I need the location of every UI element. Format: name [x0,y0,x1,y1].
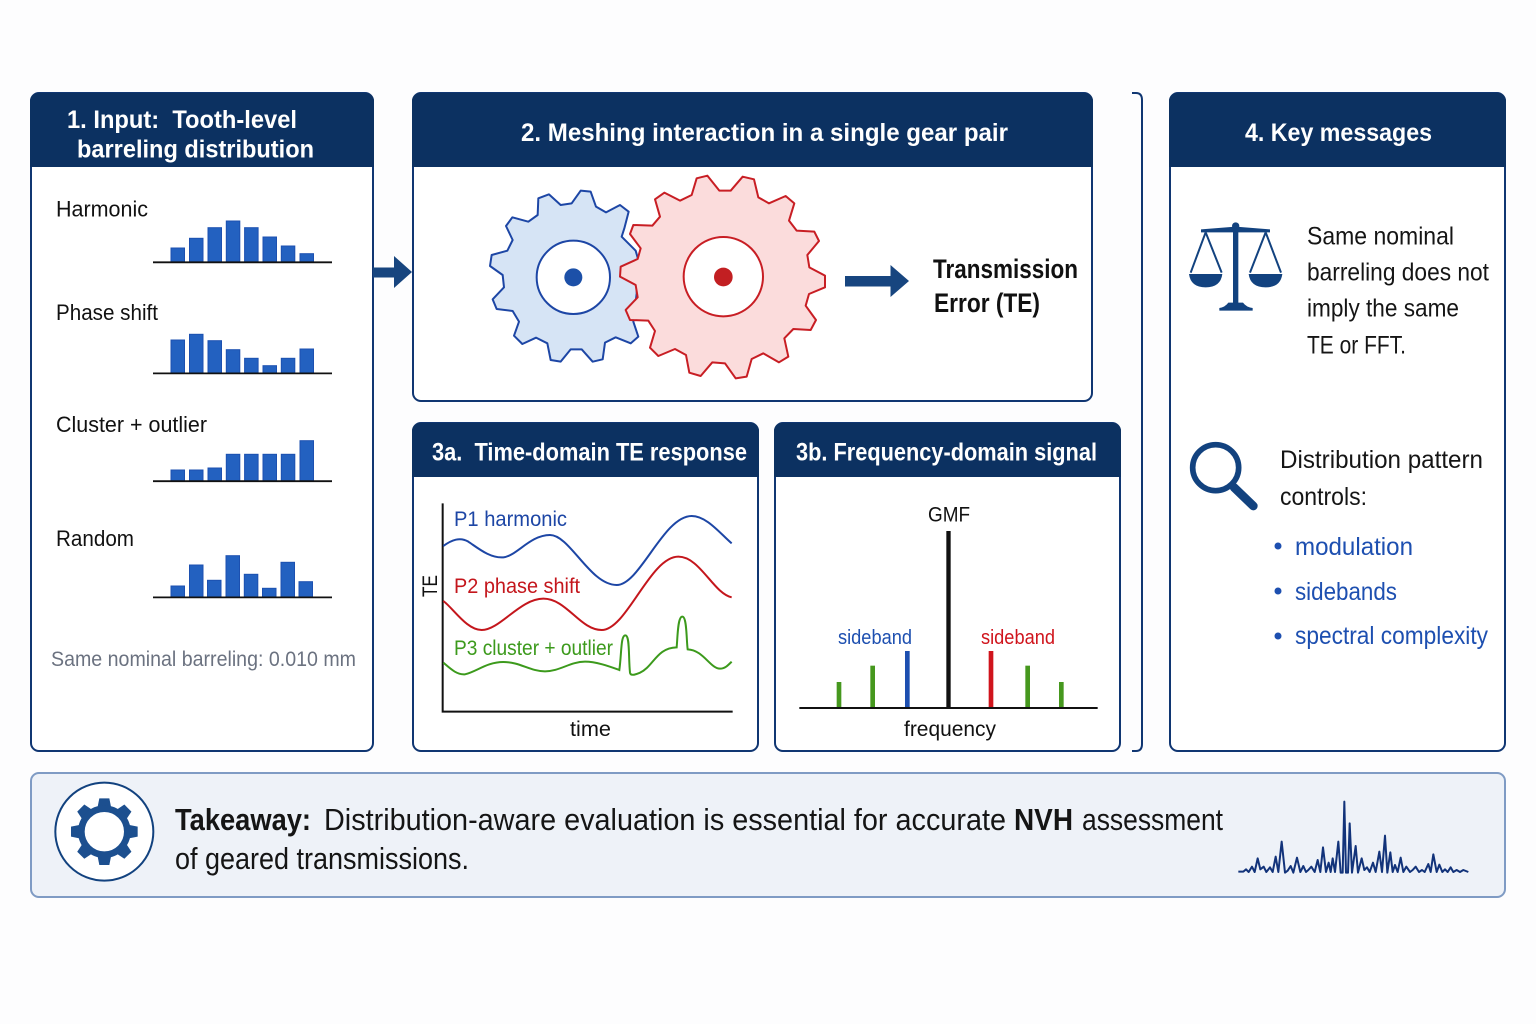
panel 1 heading: barreling distribution [77,136,314,164]
panel 4 heading: 4. Key messages [1245,119,1432,147]
panel 3a header bar [412,423,759,477]
takeaway text: NVH [1014,802,1073,837]
text: same nominal barreling: Same nominal [1307,222,1454,250]
text: distribution pattern controls: Distribution pattern [1280,446,1483,474]
arrow: input to meshing [373,256,412,288]
panel 3a heading: 3a. Time-domain TE response [432,438,747,466]
text: same nominal barreling: TE or FFT. [1307,332,1406,360]
label: transmission error: Error (TE) [934,288,1040,318]
text: same nominal barreling: imply the same [1307,294,1459,322]
icon: noise spectrum [1238,802,1468,873]
bracket [1132,93,1142,751]
line chart: TE curves [419,503,733,741]
panel 4 header bar [1169,93,1506,167]
text: distribution pattern controls: controls: [1280,483,1367,511]
takeaway text: Distribution-aware evaluation is essential for accurate [324,802,1006,837]
spectrum chart [799,504,1098,741]
label: transmission error [933,254,1078,318]
panel: meshing interaction [412,93,1093,401]
panel 3b header bar [774,423,1121,477]
bar chart: cluster + outlier [153,441,332,481]
text: same nominal barreling: barreling does not [1307,258,1489,286]
peak label: red sideband: sideband [981,627,1055,649]
takeaway text: assessment [1082,802,1223,837]
bullet list: modulation [1295,533,1413,561]
bar chart: harmonic [153,221,332,262]
panel 3b heading: 3b. Frequency-domain signal [796,438,1097,466]
bar chart: phase shift [153,334,332,373]
blue gear [490,191,638,362]
panel 2 heading: 2. Meshing interaction in a single gear pair [521,119,1008,147]
red gear [620,176,825,378]
panel: input barreling distribution [30,93,374,751]
axis label: time: time [570,718,611,741]
axis label: TE: TE [419,575,442,597]
label: transmission error: Transmission [933,254,1078,284]
peak label: blue sideband: sideband [838,627,912,649]
text: distribution pattern controls [1280,446,1483,511]
panel: takeaway [31,773,1505,897]
peak label: GMF: GMF [928,504,970,526]
bullet list: spectral complexity [1295,622,1488,650]
icon: gear in circle [55,783,153,881]
takeaway text: of geared transmissions. [175,841,469,876]
axis label: frequency: frequency [904,718,996,741]
takeaway text: Takeaway: [175,802,311,837]
panel: key messages [1169,93,1506,751]
icon: magnifying glass [1193,445,1253,506]
gear pair [490,176,825,378]
curve label: P2 phase shift: P2 phase shift [454,575,580,598]
label: harmonic: Harmonic [56,196,148,222]
label: random: Random [56,526,134,551]
panel 1 heading [67,106,314,164]
curve label: P1 harmonic: P1 harmonic [454,508,567,531]
text: same nominal barreling [1307,222,1489,360]
takeaway text [175,802,1223,876]
bullet list: sidebands [1295,578,1397,606]
panel 1 heading: 1. Input: Tooth-level [67,106,297,134]
curve label: P3 cluster + outlier: P3 cluster + outlier [454,637,613,660]
label: cluster + outlier: Cluster + outlier [56,412,207,437]
note: same nominal barreling: Same nominal barreling: 0.010 mm [51,648,356,671]
icon: balance scale [1189,222,1282,311]
bullet list [1274,533,1488,650]
panel 1 header bar [30,93,374,167]
panel: frequency-domain signal [774,423,1121,751]
label: phase shift: Phase shift [56,300,158,325]
bar chart: random [153,556,332,597]
panel: time-domain TE response [412,423,759,751]
panel 2 header bar [412,93,1093,167]
arrow: gears to transmission error [845,265,909,297]
